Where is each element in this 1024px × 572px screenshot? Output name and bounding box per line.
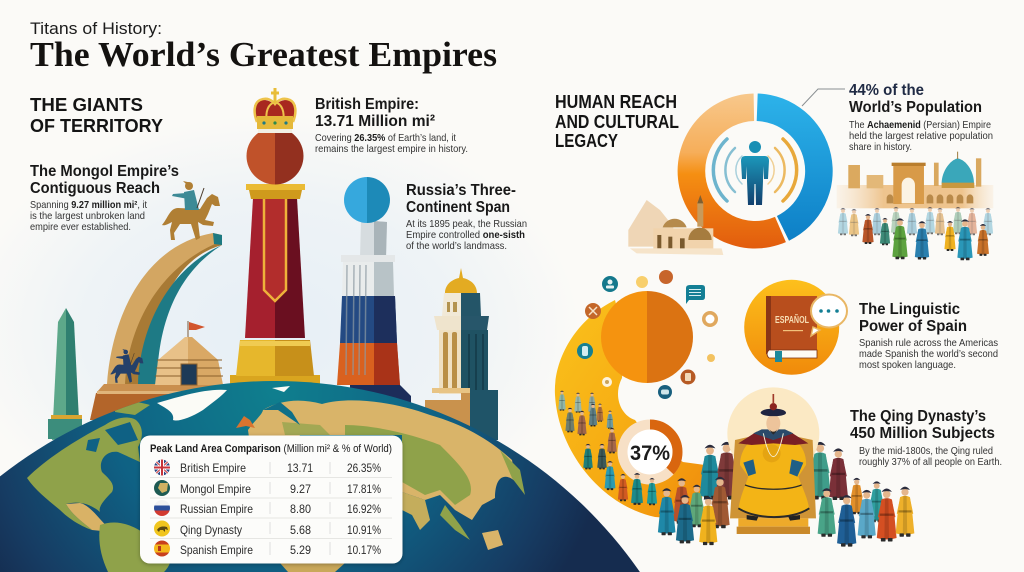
monument: green obelisk	[48, 308, 82, 440]
text: Mongol Empire: Spanning 9.27 million mi², it	[30, 199, 147, 211]
illustration: Qing emperor on throne	[727, 387, 819, 534]
Greenland	[157, 390, 227, 421]
book: ESPAÑOL	[775, 313, 809, 326]
section heading: human reach	[555, 92, 679, 151]
text: Russia: Continent Span	[406, 199, 510, 216]
illustration: Qing court figures behind	[673, 442, 884, 527]
row: Spanish Empire: 10.17%	[347, 543, 381, 557]
text: British Empire: Covering 26.35% of Earth’s land, it	[315, 132, 456, 144]
monument: British column	[230, 88, 320, 385]
text: Linguistic power	[859, 301, 998, 371]
text: Qing subjects: The Qing Dynasty’s	[850, 408, 986, 425]
text: Qing subjects: By the mid-1800s, the Qing ruled	[859, 445, 993, 457]
gold pennant inlay	[264, 198, 286, 301]
main title: The World’s Greatest Empires	[30, 35, 497, 74]
North America	[27, 418, 142, 530]
illustration: Persian city	[837, 152, 993, 208]
row: Qing Dynasty: Qing Dynasty	[180, 523, 242, 537]
UK	[236, 416, 255, 428]
row: Qing Dynasty: 10.91%	[347, 523, 381, 537]
text: Russia: Empire controlled one-sisth	[406, 229, 525, 241]
illustration: Qing court figures front	[658, 477, 914, 547]
illustration: desert buildings	[628, 195, 723, 255]
text: Russia: Russia’s Three-	[406, 182, 516, 199]
text: Linguistic power: most spoken language.	[859, 359, 956, 371]
text: British Empire	[315, 96, 468, 155]
text: Qing subjects	[850, 408, 1002, 468]
section heading: giants of territory: THE GIANTS	[30, 95, 143, 115]
text: Linguistic power: Power of Spain	[859, 318, 967, 335]
illustration: crowd on crescent	[558, 391, 657, 505]
subtitle: Titans of History:	[30, 19, 162, 38]
text: 44% population: held the largest relative population	[849, 130, 993, 142]
icon: mounted Mongol rider on arch	[162, 181, 220, 240]
text: Russia: of the world’s landmass.	[406, 240, 507, 252]
37% ring	[618, 420, 682, 484]
text: Russia	[406, 182, 527, 252]
row: Russian Empire: Russian Empire	[180, 502, 253, 516]
row: British Empire: 13.71	[287, 461, 313, 475]
row: Russian Empire: 16.92%	[347, 502, 381, 516]
row: Russian Empire	[154, 500, 381, 516]
row: British Empire: British Empire	[180, 461, 246, 475]
South America	[99, 523, 171, 572]
row: Qing Dynasty	[154, 520, 381, 537]
text: British Empire: remains the largest empire in history.	[315, 143, 468, 155]
section heading: giants of territory	[30, 95, 163, 136]
text: Mongol Empire: The Mongol Empire’s	[30, 163, 179, 180]
text: 44% population: share in history.	[849, 141, 912, 153]
monument: Mongol arch with base	[90, 181, 240, 420]
text: 44% population: World’s Population	[849, 99, 982, 116]
icon: crown	[254, 88, 296, 133]
row: British Empire	[153, 459, 381, 476]
row: British Empire: 26.35%	[347, 461, 381, 475]
row: Russian Empire: 8.80	[290, 502, 311, 516]
table header: Peak Land Area Comparison (Million mi² & % of World)	[150, 443, 392, 455]
section heading: human reach: HUMAN REACH	[555, 92, 677, 112]
Eurasia	[248, 400, 516, 520]
leader line	[802, 89, 845, 106]
section heading: giants of territory: OF TERRITORY	[30, 116, 163, 136]
text: Russia: At its 1895 peak, the Russian	[406, 218, 527, 230]
row: Spanish Empire: Spanish Empire	[180, 543, 253, 557]
text: British Empire: British Empire:	[315, 96, 419, 113]
text: Linguistic power: Spanish rule across the Americas	[859, 337, 998, 349]
globe	[0, 381, 640, 572]
orb	[247, 128, 275, 184]
row: Mongol Empire: Mongol Empire	[180, 482, 251, 496]
37% ring: 37%	[630, 442, 670, 465]
text: 44% population: The Achaemenid (Persian) Empire	[849, 119, 991, 131]
monument: right tower	[425, 268, 498, 440]
monument: Russian column	[337, 177, 411, 412]
icon: person with waves	[713, 139, 797, 205]
donut chart: 44% of world population	[678, 94, 833, 248]
text: Qing subjects: 450 Million Subjects	[850, 425, 995, 442]
text: 44% population: 44% of the	[849, 82, 924, 99]
background sky glow	[0, 115, 580, 545]
row: Mongol Empire: 17.81%	[347, 482, 381, 496]
Eurasia green	[345, 425, 471, 505]
row: Spanish Empire	[154, 540, 381, 557]
row: Qing Dynasty: 5.68	[290, 523, 311, 537]
monument: yurt	[155, 321, 223, 385]
crescent shape with language icons	[555, 270, 718, 520]
text: Linguistic power: made Spanish the world’s second	[859, 348, 998, 360]
text: Mongol Empire: Contiguous Reach	[30, 180, 160, 197]
Africa south of the table	[280, 563, 345, 572]
table: peak land area comparison	[140, 436, 402, 564]
text: Qing subjects: roughly 37% of all people on Earth.	[859, 456, 1002, 468]
text: Mongol Empire	[30, 163, 179, 233]
text: Linguistic power: The Linguistic	[859, 301, 960, 318]
icon: dark rider silhouette	[110, 349, 143, 383]
India, SE Asia, Australia	[402, 492, 430, 530]
pie circle	[601, 291, 647, 383]
section heading: human reach: LEGACY	[555, 131, 618, 151]
illustration: Persian crowd	[838, 207, 993, 260]
language icons	[577, 270, 718, 399]
text: British Empire: 13.71 Million mi²	[315, 113, 435, 130]
speech bubble	[811, 294, 847, 336]
row: Mongol Empire: 9.27	[290, 482, 311, 496]
section heading: human reach: AND CULTURAL	[555, 112, 679, 132]
text: Mongol Empire: empire ever established.	[30, 221, 131, 233]
row: Spanish Empire: 5.29	[290, 543, 311, 557]
book icon: Español	[744, 280, 847, 375]
title block	[30, 19, 497, 74]
row: Mongol Empire	[154, 480, 381, 496]
text: Mongol Empire: is the largest unbroken land	[30, 210, 145, 222]
text: 44% population	[849, 82, 993, 153]
